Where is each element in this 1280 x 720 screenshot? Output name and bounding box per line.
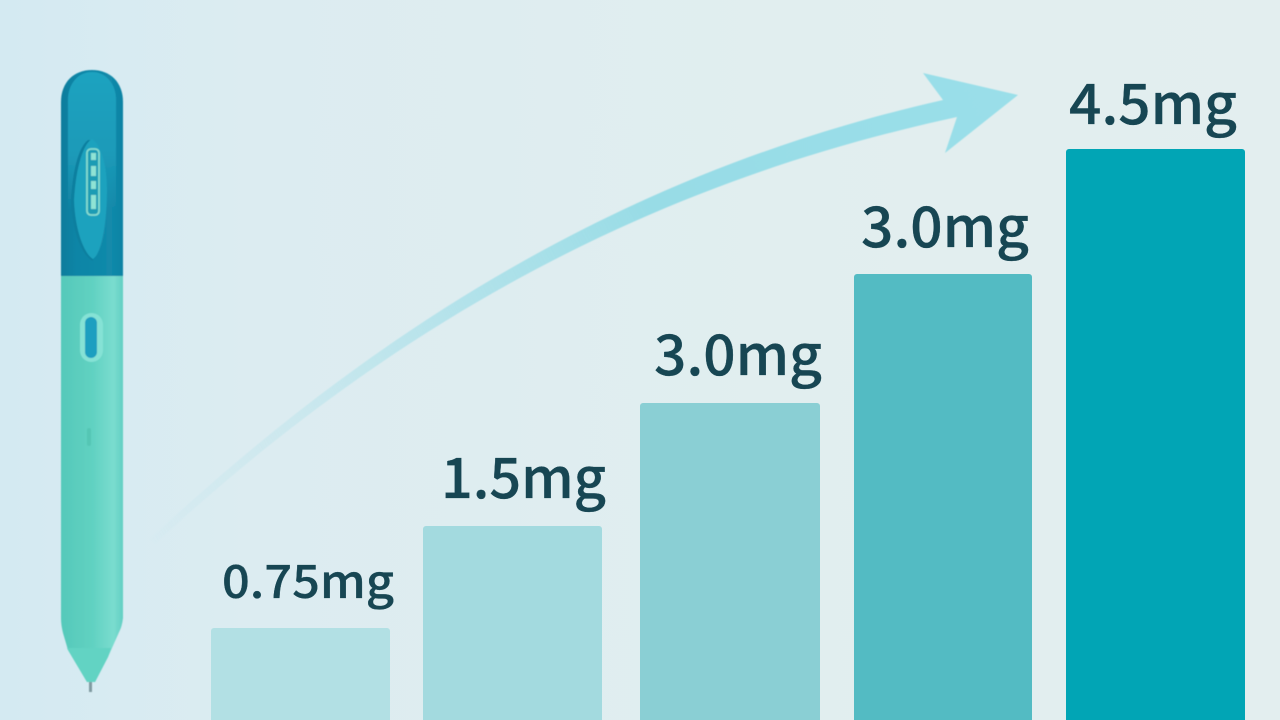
bar: 1.5mg: 1.5mg [441,434,606,515]
pen cap dome highlight [68,72,116,210]
pen needle [89,682,92,692]
pen body [61,276,123,682]
bar: 4.5mg [1066,60,1245,720]
bar: 0.75mg [211,546,394,720]
arrow: rising trend [150,73,1018,543]
pen clip [74,139,107,259]
pen cap [61,70,123,276]
pen tip ring [67,648,111,682]
bar: 3.0mg right: 3.0mg [861,183,1029,264]
icon: injection pen [61,70,123,692]
pen window [80,313,103,362]
bar: 3.0mg left: 3.0mg [654,311,822,392]
bar: 1.5mg [423,434,606,720]
bar: 3.0mg right [854,183,1032,720]
pen body mark [87,428,91,446]
bar chart [211,60,1245,720]
pen clip shadow [71,140,93,261]
bar: 0.75mg: 0.75mg [222,546,394,612]
bar: 4.5mg: 4.5mg [1069,60,1237,141]
bar: 3.0mg left [640,311,822,720]
pen label [87,149,99,215]
